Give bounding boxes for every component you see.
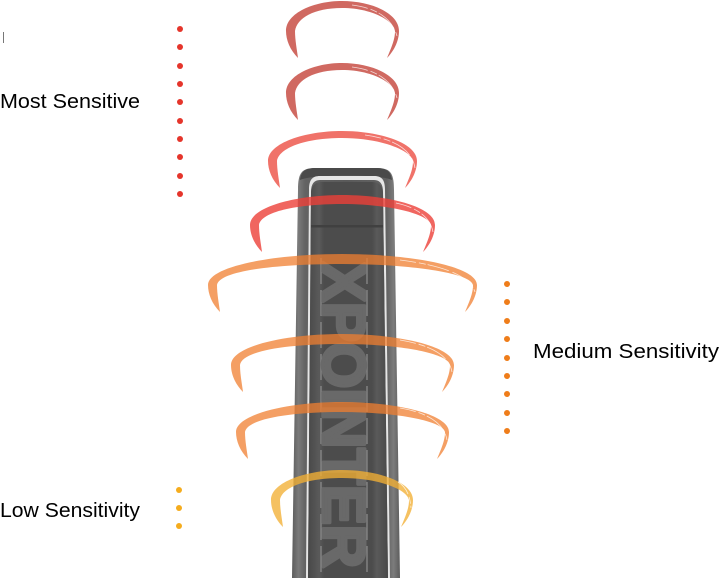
dotted line: most sensitive bbox=[177, 26, 183, 197]
device seam line bbox=[311, 225, 383, 228]
dotted line: medium sensitivity bbox=[504, 281, 510, 434]
arc 7: medium sensitivity bbox=[236, 402, 449, 459]
arc 1: most sensitive bbox=[286, 1, 399, 58]
label: medium sensitivity: Medium Sensitivity bbox=[533, 340, 720, 363]
device white highlight frame bbox=[306, 176, 390, 578]
device embossed wordmark: XPOINTER bbox=[310, 262, 377, 568]
arc 5: medium sensitivity bbox=[208, 254, 477, 312]
dotted line: low sensitivity bbox=[176, 487, 182, 529]
arc 4: most sensitive bbox=[250, 195, 435, 252]
arc 3: most sensitive bbox=[268, 131, 417, 188]
device side dashes bbox=[321, 258, 367, 578]
arc 8: low sensitivity bbox=[271, 470, 413, 527]
small tick mark bbox=[3, 32, 4, 43]
label: low sensitivity: Low Sensitivity bbox=[0, 499, 141, 522]
device top cap shading bbox=[300, 168, 392, 180]
label: most sensitive: Most Sensitive bbox=[0, 90, 140, 113]
arc 6: medium sensitivity bbox=[231, 334, 454, 392]
arc 2: most sensitive bbox=[286, 63, 399, 120]
device inner panel bbox=[308, 182, 388, 578]
device outer shell bbox=[292, 168, 400, 578]
device: Xpointer pen body bbox=[292, 168, 400, 578]
